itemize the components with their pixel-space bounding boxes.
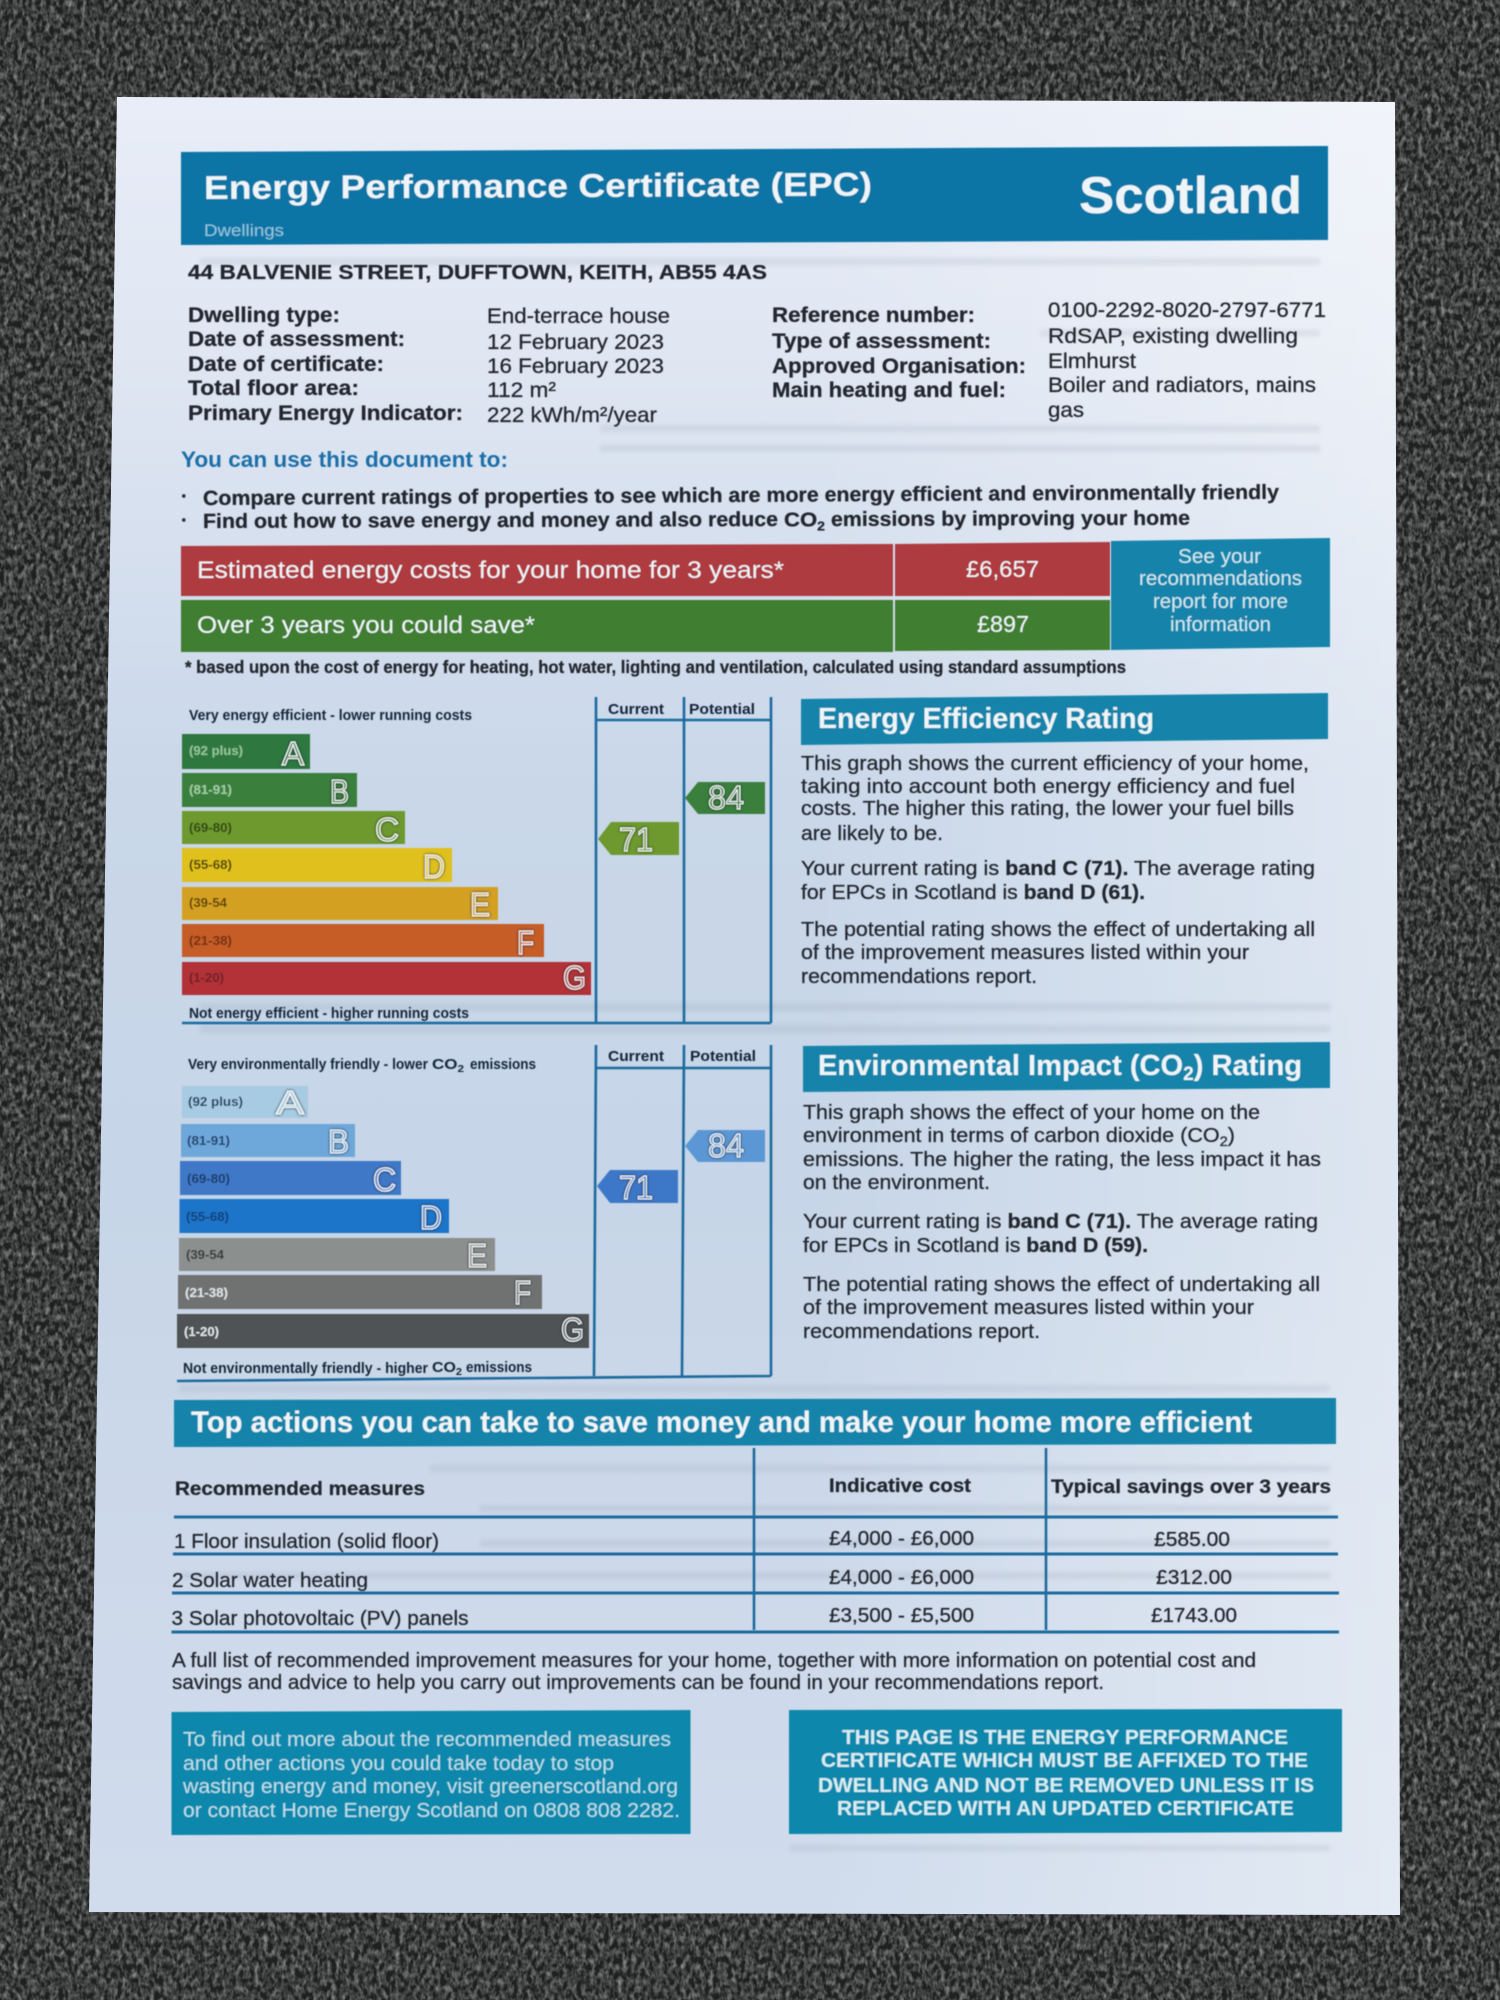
property details left: Date of assessment:: [188, 328, 405, 351]
environmental impact description: ): [1228, 1124, 1235, 1147]
further information box: or contact Home Energy Scotland on 0808 808 2282.: [183, 1800, 680, 1822]
band A: A: [276, 1084, 304, 1121]
energy efficiency description: of the improvement measures listed within your: [801, 941, 1249, 964]
chart bottom caption: CO: [432, 1360, 454, 1376]
property details right: Reference number:: [772, 304, 975, 327]
band A: A: [282, 735, 304, 772]
recommendations note: [172, 1650, 1256, 1694]
property details left: End-terrace house: [487, 305, 670, 328]
uses list: Find out how to save energy and money and also reduce: [203, 508, 778, 533]
measure 1: £585.00: [1154, 1529, 1230, 1551]
chart top caption: [188, 1057, 536, 1075]
recommendations note: savings and advice to help you carry out improvements can be found in your recommendations report.: [172, 1672, 1104, 1694]
band C: (69-80): [187, 1172, 230, 1186]
property details right: Boiler and radiators, mains: [1048, 374, 1316, 397]
further information box: wasting energy and money, visit greenerscotland.org: [182, 1776, 678, 1798]
band E: (39-54: [186, 1248, 224, 1262]
property details left: Dwelling type:: [188, 304, 340, 327]
property details left: 112 m²: [487, 379, 556, 402]
uses list: Compare current ratings of properties to see which are more energy efficient and environmentally friendly: [203, 481, 1280, 510]
band G: G: [561, 1311, 584, 1348]
panel: environmental impact rating: [803, 1042, 1330, 1343]
measure 1: [174, 1528, 1230, 1553]
paper sheet: [89, 97, 1400, 1915]
energy efficiency description: Your current rating is band C (71). The average rating: [801, 857, 1315, 880]
current and potential columns: Current: [608, 701, 664, 718]
band F: [182, 924, 544, 961]
measure 2: £4,000 - £6,000: [829, 1567, 974, 1589]
current and potential columns: [177, 1045, 771, 1381]
cost footnote: * based upon the cost of energy for heating, hot water, lighting and ventilation, calculated using standard assumptions: [185, 657, 1126, 677]
band F: F: [514, 1274, 531, 1311]
current and potential columns: Current: [608, 1048, 664, 1065]
environmental impact description: emissions. The higher the rating, the less impact it has: [803, 1148, 1321, 1171]
table column headings: Typical savings over 3 years: [1051, 1476, 1331, 1498]
band D: D: [420, 1199, 442, 1236]
energy efficiency description: taking into account both energy efficiency and fuel: [801, 775, 1295, 798]
property address: 44 BALVENIE STREET, DUFFTOWN, KEITH, AB55 4AS: [188, 262, 767, 284]
further information box: and other actions you could take today to stop: [183, 1753, 614, 1775]
band G: [182, 959, 591, 996]
band D: (55-68): [186, 1210, 229, 1224]
chart bottom caption: Not environmentally friendly - higher: [183, 1361, 428, 1377]
band D: (55-68): [189, 858, 232, 872]
certificate notice box: REPLACED WITH AN UPDATED CERTIFICATE: [837, 1798, 1294, 1820]
band D: [182, 848, 452, 885]
band B: (81-91): [189, 783, 232, 797]
environmental impact description: [803, 1101, 1321, 1343]
band D: [180, 1199, 449, 1236]
band E: E: [467, 1237, 487, 1274]
environmental impact description: environment in terms of carbon dioxide (CO: [803, 1124, 1200, 1147]
measure 1: 1 Floor insulation (solid floor): [174, 1531, 439, 1553]
recommendations callout: recommendations: [1139, 568, 1302, 590]
panel: energy efficiency rating: [801, 693, 1328, 988]
band B: B: [328, 1123, 349, 1160]
current rating arrow 71: [598, 821, 679, 858]
recommendations callout: report for more: [1153, 591, 1288, 613]
property details left: Primary Energy Indicator:: [188, 402, 463, 425]
current rating arrow 71: [597, 1169, 678, 1206]
uses heading: You can use this document to:: [181, 447, 508, 472]
energy efficiency description: The potential rating shows the effect of undertaking all: [801, 918, 1315, 941]
measure 3: [172, 1605, 1237, 1630]
band E: E: [470, 886, 490, 923]
potential rating arrow 84: [685, 1127, 765, 1164]
property details right: Elmhurst: [1048, 350, 1136, 373]
certificate notice box: THIS PAGE IS THE ENERGY PERFORMANCE: [842, 1727, 1288, 1749]
environmental impact chart: [177, 1045, 771, 1381]
recommendations callout: information: [1170, 614, 1271, 636]
band F: [178, 1274, 542, 1311]
band D: D: [423, 848, 445, 885]
chart top caption: Very environmentally friendly - lower: [188, 1057, 428, 1073]
property details right: Approved Organisation:: [772, 355, 1026, 378]
further information box: [172, 1710, 690, 1835]
header banner: [181, 146, 1328, 245]
current and potential columns: [182, 697, 771, 1023]
uses list: CO: [784, 508, 815, 532]
property details right: Main heating and fuel:: [772, 379, 1006, 402]
band B: [182, 773, 357, 810]
band F: (21-38): [189, 934, 232, 948]
band E: [179, 1237, 495, 1274]
property details right: RdSAP, existing dwelling: [1048, 325, 1298, 348]
measure 2: [172, 1567, 1232, 1592]
current rating arrow 71: 71: [619, 821, 653, 858]
energy efficiency description: for EPCs in Scotland is band D (61).: [801, 881, 1145, 904]
dwellings subtitle: Dwellings: [204, 221, 284, 240]
band G: (1-20): [189, 971, 224, 985]
potential rating arrow 84: [685, 779, 765, 816]
property details left: Total floor area:: [188, 377, 359, 400]
chart top caption: 2: [457, 1064, 465, 1075]
estimated costs row: [181, 542, 1110, 596]
recommendations note: A full list of recommended improvement measures for your home, together with more information on potential cost and: [172, 1650, 1256, 1672]
band F: F: [517, 924, 534, 961]
energy efficiency description: costs. The higher this rating, the lower your fuel bills: [801, 797, 1294, 820]
chart top caption: emissions: [470, 1057, 536, 1073]
band C: [180, 1161, 401, 1198]
energy efficiency description: This graph shows the current efficiency of your home,: [801, 752, 1309, 775]
potential rating arrow 84: 84: [708, 779, 744, 816]
environmental impact heading: Environmental Impact (CO: [818, 1050, 1182, 1082]
environmental impact description: 2: [1220, 1133, 1228, 1149]
certificate title: Energy Performance Certificate (EPC): [204, 166, 872, 206]
environmental impact description: on the environment.: [803, 1171, 990, 1194]
band B: (81-91): [187, 1134, 230, 1148]
savings row: £897: [977, 611, 1029, 637]
certificate notice box: CERTIFICATE WHICH MUST BE AFFIXED TO THE: [821, 1750, 1308, 1772]
environmental impact description: recommendations report.: [803, 1320, 1040, 1343]
chart bottom caption: [183, 1360, 532, 1378]
band F: (21-38): [185, 1286, 228, 1300]
band C: C: [375, 811, 399, 848]
recommendations callout: [1111, 538, 1330, 650]
energy efficiency heading: Energy Efficiency Rating: [818, 703, 1154, 735]
chart top caption: Very energy efficient - lower running costs: [189, 708, 472, 724]
band C: (69-80): [189, 821, 232, 835]
uses list: 2: [817, 518, 825, 534]
energy efficiency chart: [182, 697, 771, 1023]
band E: [182, 886, 498, 923]
cost summary table: [181, 538, 1330, 652]
environmental impact description: Your current rating is band C (71). The average rating: [803, 1210, 1318, 1233]
measure 3: 3 Solar photovoltaic (PV) panels: [172, 1608, 468, 1630]
measure 2: 2 Solar water heating: [172, 1570, 368, 1592]
savings row: [181, 600, 1110, 652]
environmental impact description: for EPCs in Scotland is band D (59).: [803, 1234, 1148, 1257]
band A: (92 plus): [189, 744, 243, 758]
current and potential columns: Potential: [690, 1048, 756, 1065]
environmental impact heading: ) Rating: [1194, 1050, 1302, 1082]
top actions banner: Top actions you can take to save money and make your home more efficient: [191, 1406, 1252, 1439]
table column headings: [175, 1475, 1331, 1500]
table column headings: Indicative cost: [829, 1475, 972, 1497]
chart bottom caption: 2: [456, 1367, 462, 1378]
table column headings: Recommended measures: [175, 1478, 425, 1500]
energy efficiency description: are likely to be.: [801, 822, 943, 845]
band A: [182, 1084, 308, 1121]
savings row: Over 3 years you could save*: [197, 612, 535, 639]
property details left: [188, 304, 670, 427]
band C: [182, 811, 405, 848]
band G: G: [563, 959, 586, 996]
property details left: Date of certificate:: [188, 353, 384, 376]
measure 1: £4,000 - £6,000: [829, 1528, 974, 1550]
uses list: ·: [181, 510, 188, 532]
property details right: [772, 299, 1326, 422]
environmental impact heading: 2: [1183, 1064, 1194, 1085]
certificate notice box: [789, 1709, 1342, 1834]
top actions banner: [174, 1398, 1336, 1447]
band A: [182, 734, 310, 772]
uses list: ·: [181, 486, 188, 508]
band G: [177, 1311, 589, 1348]
energy efficiency description: recommendations report.: [801, 965, 1037, 988]
current rating arrow 71: 71: [619, 1169, 653, 1206]
environmental impact description: The potential rating shows the effect of undertaking all: [803, 1273, 1320, 1296]
band E: (39-54: [189, 896, 227, 910]
measure 3: £3,500 - £5,500: [829, 1605, 974, 1627]
chart bottom caption: emissions: [466, 1360, 532, 1376]
recommended measures table: [172, 1448, 1339, 1632]
chart bottom caption: Not energy efficient - higher running costs: [189, 1006, 469, 1022]
property details right: 0100-2292-8020-2797-6771: [1048, 299, 1326, 322]
band B: B: [330, 773, 349, 810]
certificate notice box: DWELLING AND NOT BE REMOVED UNLESS IT IS: [818, 1775, 1314, 1797]
property details right: Type of assessment:: [772, 330, 991, 353]
estimated costs row: Estimated energy costs for your home for 3 years*: [197, 557, 784, 584]
further information box: To find out more about the recommended measures: [183, 1729, 671, 1751]
current and potential columns: Potential: [689, 701, 755, 718]
band C: C: [373, 1161, 396, 1198]
property details left: 12 February 2023: [487, 331, 664, 354]
measure 2: £312.00: [1156, 1567, 1232, 1589]
property details left: 222 kWh/m²/year: [487, 404, 657, 427]
measure 3: £1743.00: [1151, 1605, 1237, 1627]
chart top caption: CO: [432, 1057, 454, 1073]
uses list: [181, 481, 1280, 534]
energy efficiency description: [801, 752, 1315, 988]
environmental impact description: of the improvement measures listed within your: [803, 1296, 1254, 1319]
environmental impact heading: [803, 1042, 1330, 1092]
band B: [181, 1123, 355, 1160]
uses list: emissions by improving your home: [831, 507, 1190, 531]
potential rating arrow 84: 84: [708, 1127, 744, 1164]
environmental impact description: This graph shows the effect of your home on the: [803, 1101, 1260, 1124]
band G: (1-20): [184, 1325, 219, 1339]
energy efficiency heading: [801, 693, 1328, 745]
band A: (92 plus): [188, 1095, 243, 1109]
property details left: 16 February 2023: [487, 355, 664, 378]
Scotland label: Scotland: [1079, 167, 1302, 225]
property details right: gas: [1048, 399, 1084, 422]
recommendations callout: See your: [1178, 546, 1261, 568]
estimated costs row: £6,657: [966, 556, 1039, 582]
